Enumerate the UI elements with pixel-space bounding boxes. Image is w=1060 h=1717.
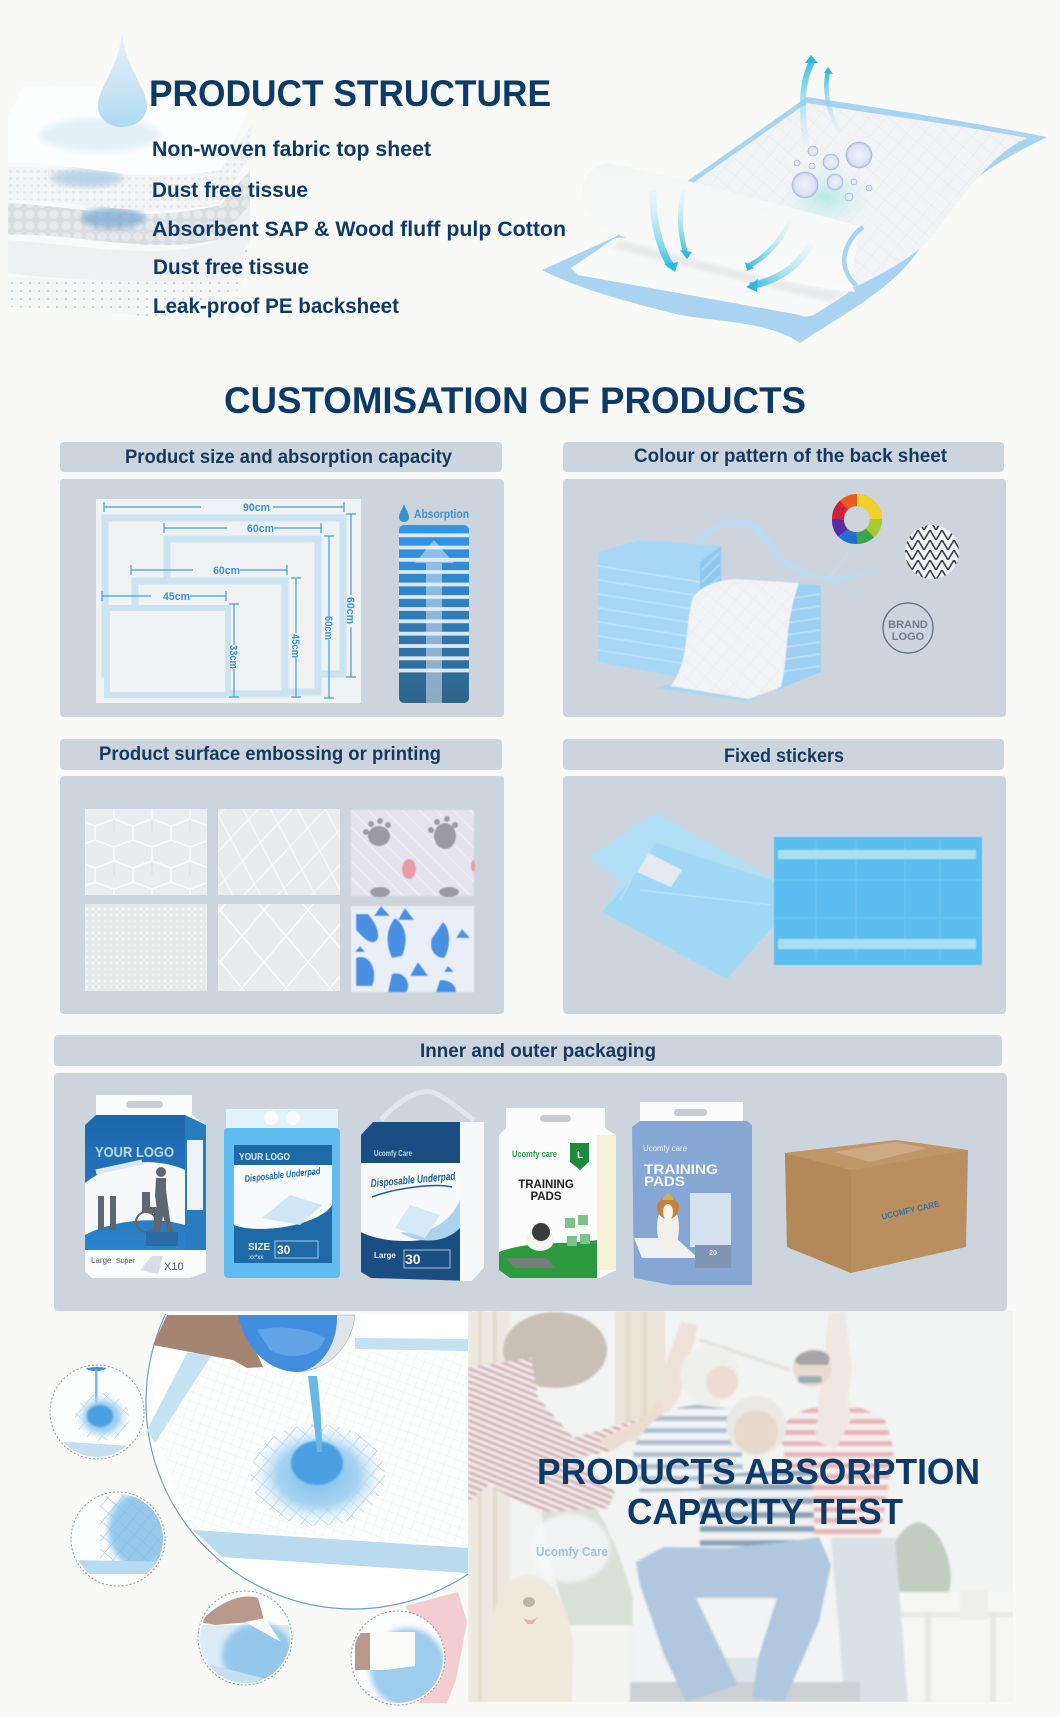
texture: large diamonds — [218, 904, 340, 991]
package: disposable underpad light blue: Disposable Underpad — [244, 1166, 321, 1185]
package: ucomfy care navy bag: 30 — [405, 1251, 421, 1267]
panel header: surface embossing — [60, 739, 502, 770]
package: training pads green — [499, 1108, 616, 1278]
size diagram: 60cm — [322, 616, 334, 640]
package: disposable underpad light blue: 30 — [277, 1243, 291, 1257]
illustration: large absorption test circle — [145, 1314, 468, 1610]
package: training pads dog — [632, 1102, 752, 1285]
package: training pads dog: Ucomfy care — [643, 1143, 687, 1153]
size diagram: 60cm — [247, 523, 274, 535]
photo: happy family with wheelchair user — [468, 1311, 1013, 1702]
panel header: colour or pattern: Colour or pattern of the back sheet — [634, 446, 948, 467]
panel header: fixed stickers: Fixed stickers — [724, 746, 844, 767]
panel header: product size: Product size and absorption capacity — [125, 447, 452, 468]
panel: product size and absorption capacity — [60, 479, 504, 717]
size diagram: 45cm — [289, 634, 301, 658]
package: training pads dog: 20 — [709, 1250, 717, 1257]
package: ucomfy care navy bag: Disposable Underpad — [370, 1171, 456, 1190]
texture: fine dots — [85, 904, 207, 991]
package: training pads green: L — [577, 1150, 583, 1161]
panel header: packaging: Inner and outer packaging — [420, 1041, 656, 1062]
chart: absorption stack with arrow — [399, 525, 469, 703]
texture: paw print — [351, 810, 475, 897]
illustration: layered pad cross-section — [8, 86, 253, 317]
ribbon — [690, 519, 892, 605]
package: ucomfy care navy bag: Large — [374, 1251, 396, 1260]
heading: products absorption capacity test: CAPACITY TEST — [627, 1491, 903, 1532]
package: your logo blue bag: Super — [116, 1258, 135, 1265]
size diagram — [96, 499, 361, 703]
package: your logo blue bag: YOUR LOGO — [95, 1144, 174, 1161]
package: training pads green: TRAINING — [518, 1179, 574, 1191]
panel header: surface embossing: Product surface embossing or printing — [99, 744, 441, 765]
illustration: detail circle spread — [70, 1492, 172, 1586]
size diagram: 45cm — [163, 591, 190, 603]
text block: structure layers: Absorbent SAP & Wood fluff pulp Cotton — [152, 218, 566, 241]
illustration: pad stacks — [598, 540, 821, 702]
package: training pads green: PADS — [530, 1191, 562, 1203]
panel: colour or pattern of the back sheet — [563, 479, 1006, 717]
title: product structure: PRODUCT STRUCTURE — [149, 73, 551, 114]
heading: products absorption capacity test: PRODUCTS ABSORPTION — [537, 1451, 980, 1492]
panel: inner and outer packaging — [54, 1073, 1007, 1311]
text block: structure layers: Dust free tissue — [152, 179, 308, 202]
package: cardboard box: UCOMFY CARE — [880, 1198, 940, 1222]
icon: zigzag pattern swatch — [905, 525, 959, 579]
package: disposable underpad light blue: xx*xx — [249, 1255, 263, 1261]
size diagram: 60cm — [213, 565, 240, 577]
illustration: peeled pad with airflow arrows — [542, 55, 1047, 343]
text block: structure layers: Non-woven fabric top sheet — [152, 138, 431, 161]
package: your logo blue bag: X10 — [164, 1261, 184, 1273]
icon: colour wheel — [838, 500, 876, 538]
package: training pads green: Ucomfy care — [512, 1149, 557, 1159]
illustration: flat pad with strips — [774, 837, 982, 965]
text block: structure layers: Leak-proof PE backsheet — [153, 295, 399, 318]
package: ucomfy care navy bag: Ucomfy Care — [374, 1148, 412, 1158]
texture: diagonal quilt — [218, 809, 340, 895]
background pink clothing under circle — [405, 1592, 467, 1703]
package: disposable underpad light blue: YOUR LOGO — [239, 1152, 290, 1163]
icon: absorption drop — [399, 504, 409, 522]
panel header: colour or pattern — [563, 442, 1004, 472]
heading: customisation of products: CUSTOMISATION OF PRODUCTS — [224, 380, 806, 421]
size diagram: 60cm — [344, 597, 356, 624]
heading: products absorption capacity test — [537, 1451, 980, 1532]
size diagram: 90cm — [243, 502, 270, 514]
illustration: detail circle peel — [198, 1591, 295, 1690]
watermark: ucomfy care cloud — [530, 1514, 610, 1582]
watermark: ucomfy care cloud: Ucomfy Care — [536, 1545, 608, 1559]
package: disposable underpad light blue — [224, 1109, 340, 1278]
icon: brand logo badge — [883, 603, 933, 653]
icon: brand logo badge: LOGO — [892, 631, 925, 643]
icon: water drop — [98, 33, 147, 127]
panel: fixed stickers — [563, 776, 1006, 1014]
panel: surface embossing or printing — [60, 776, 504, 1014]
package: your logo blue bag: Large — [91, 1256, 112, 1265]
branch to colour wheel — [829, 552, 849, 578]
label: absorption: Absorption — [414, 509, 469, 521]
texture: honeycomb — [85, 809, 207, 895]
package: disposable underpad light blue: SIZE — [248, 1242, 271, 1253]
icon: brand logo badge: BRAND — [888, 619, 928, 631]
illustration: folded pad with sticker — [589, 813, 790, 979]
text block: structure layers — [152, 138, 566, 318]
package: training pads dog: PADS — [644, 1173, 685, 1189]
illustration: detail circle tissue — [351, 1611, 446, 1708]
panel header: packaging — [54, 1035, 1002, 1066]
package: your logo blue bag — [85, 1095, 206, 1278]
illustration: detail circle pour — [50, 1364, 144, 1460]
size diagram: 33cm — [227, 645, 239, 669]
package: training pads dog: TRAINING — [644, 1161, 718, 1177]
package: cardboard box — [785, 1140, 968, 1273]
panel header: fixed stickers — [563, 739, 1004, 770]
texture: blue bear print — [351, 906, 474, 992]
text block: structure layers: Dust free tissue — [153, 256, 309, 279]
package: ucomfy care navy bag — [361, 1092, 484, 1281]
panel header: product size — [60, 442, 502, 472]
